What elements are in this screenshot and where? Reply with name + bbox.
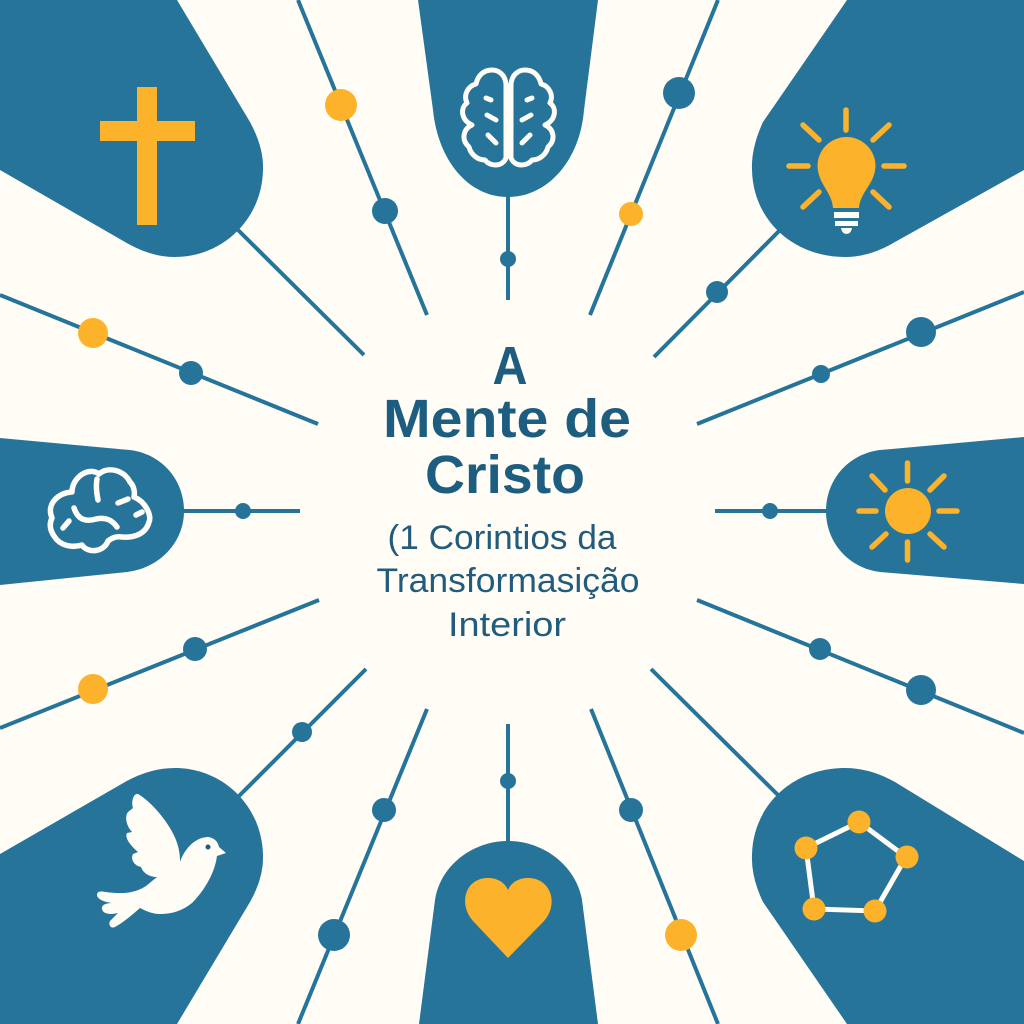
title: A <box>492 336 528 396</box>
connector: top spoke <box>500 190 516 300</box>
subtitle: (1 Corintios da <box>388 519 617 557</box>
icon: cross <box>100 87 195 225</box>
panel: love (bottom) <box>419 841 598 1024</box>
title: Mente de <box>383 389 631 449</box>
connector: left upper spoke <box>0 295 318 424</box>
panel: renewal (left) <box>0 438 184 585</box>
icon: brain front view <box>463 70 554 165</box>
connector: left spoke <box>180 503 300 519</box>
subtitle <box>376 519 640 644</box>
icon: brain side view <box>50 470 150 551</box>
connector: upper-right diagonal <box>654 228 782 357</box>
panel: mind (top) <box>418 0 598 197</box>
connector: bottom-left outer spoke <box>298 709 427 1024</box>
connector: lower-right diagonal <box>651 669 782 799</box>
icon: dove <box>97 794 226 928</box>
connector: bottom spoke <box>500 724 516 845</box>
connector: right upper spoke <box>697 292 1024 424</box>
panel: community (bottom-right) <box>752 768 1024 1024</box>
icon: heart <box>465 878 552 958</box>
connector: bottom-right outer spoke <box>591 709 718 1024</box>
panel: peace (bottom-left) <box>0 768 263 1024</box>
connector: lower-left diagonal <box>236 669 366 799</box>
panel: faith (top-left) <box>0 0 263 257</box>
subtitle: Interior <box>448 606 566 644</box>
title <box>383 336 631 505</box>
panel: light (right) <box>826 437 1024 584</box>
connector: right lower spoke <box>697 600 1024 733</box>
connector: left lower spoke <box>0 600 319 728</box>
icon: sun <box>859 463 957 560</box>
connector: right spoke <box>715 503 830 519</box>
icon: light bulb <box>789 110 904 234</box>
panel: insight (top-right) <box>752 0 1024 257</box>
title: Cristo <box>425 445 585 505</box>
connector: upper-left diagonal <box>236 228 364 355</box>
connector: top-right outer spoke <box>590 0 718 315</box>
icon: network pentagon <box>794 810 918 922</box>
connector: top-left outer spoke <box>298 0 427 315</box>
subtitle: Transformasição <box>376 562 640 600</box>
